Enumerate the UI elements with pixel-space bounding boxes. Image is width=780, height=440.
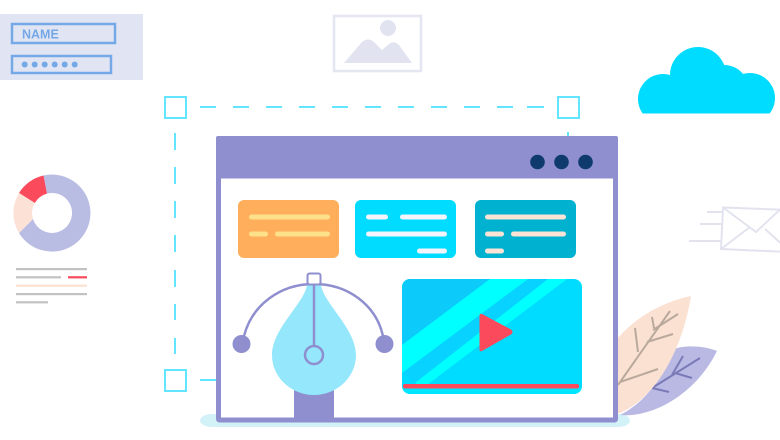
ground shadow — [200, 414, 630, 427]
card: orange — [238, 200, 339, 258]
password field — [12, 56, 111, 73]
chart legend lines — [16, 268, 87, 303]
icon: pen tool — [232, 274, 394, 420]
icon: image placeholder — [334, 16, 421, 71]
leaf: peach — [612, 296, 691, 413]
icon: cloud — [638, 47, 775, 114]
selection frame: dashes and handles — [165, 97, 579, 391]
leaf: purple — [620, 346, 717, 415]
leaves — [612, 296, 717, 415]
card: cyan — [355, 200, 456, 258]
name field: NAME — [22, 28, 59, 42]
play button — [480, 314, 512, 351]
browser window — [216, 136, 618, 420]
login form panel — [0, 14, 143, 80]
donut chart — [13, 175, 90, 252]
browser title bar — [216, 136, 618, 178]
video player — [402, 279, 582, 394]
name field — [12, 24, 115, 43]
progress bar — [403, 384, 579, 388]
icon: flying envelope — [689, 205, 780, 252]
card: teal — [475, 200, 576, 258]
